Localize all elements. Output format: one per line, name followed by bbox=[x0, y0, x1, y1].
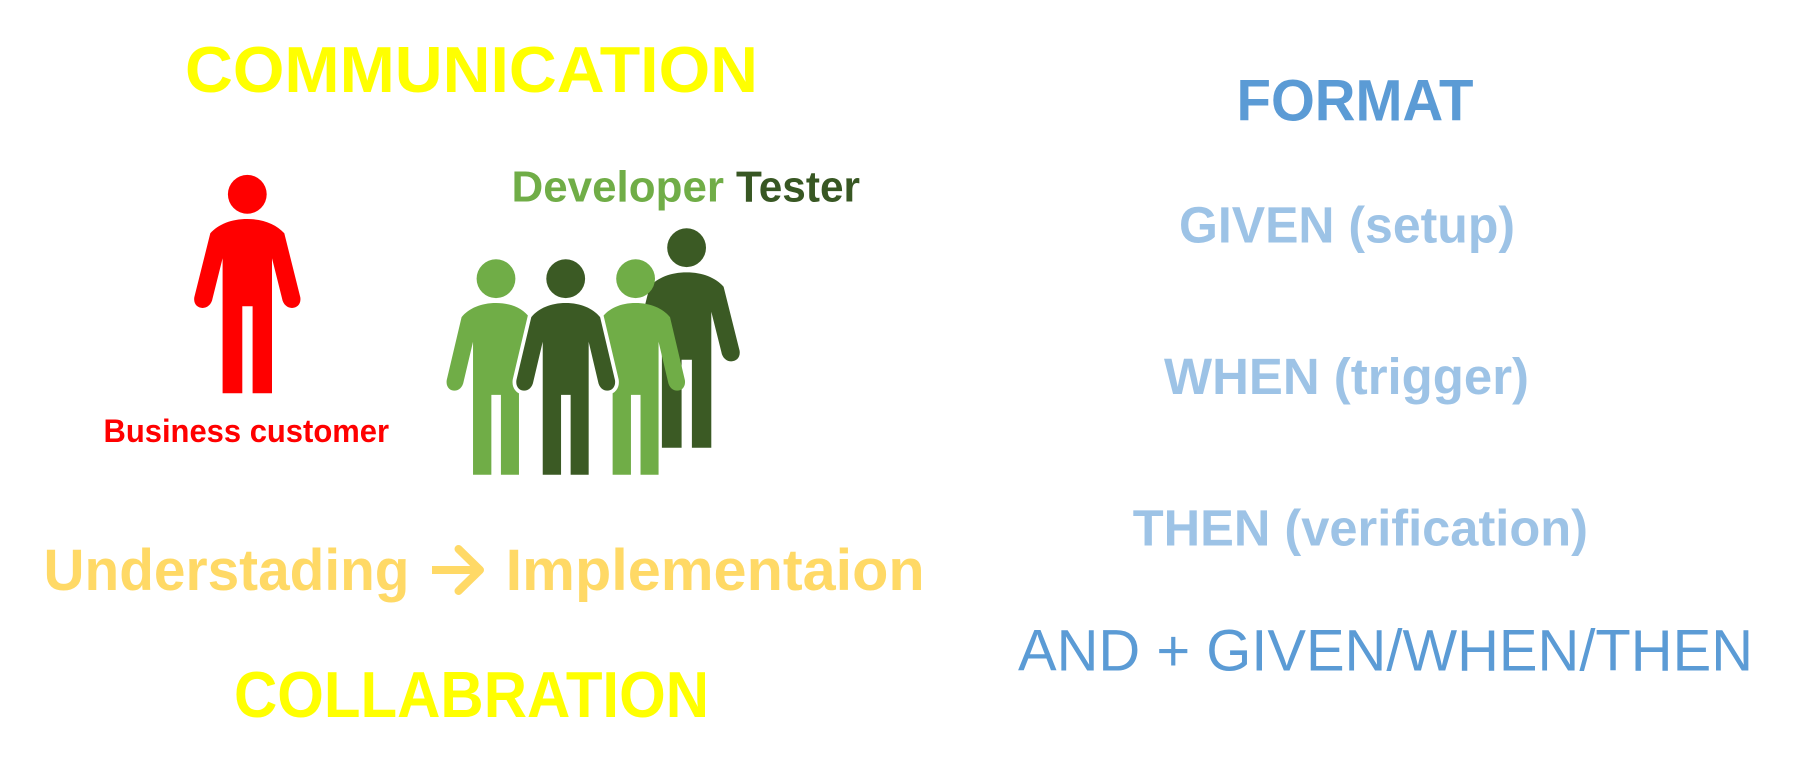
icon: business customer bbox=[194, 175, 300, 393]
label: business customer: Business customer bbox=[104, 413, 389, 449]
text: understanding to implementation: Understading bbox=[44, 538, 410, 603]
text: understanding to implementation: Implementaion bbox=[506, 538, 925, 603]
heading: format: FORMAT bbox=[1236, 69, 1474, 134]
label: tester: Tester bbox=[736, 163, 860, 212]
panel: format bbox=[1018, 69, 1753, 684]
icon: left developer bbox=[447, 259, 530, 475]
text: when: WHEN (trigger) bbox=[1164, 348, 1529, 405]
heading: communication: COMMUNICATION bbox=[185, 33, 758, 106]
icon: arrow bbox=[432, 549, 480, 591]
text: then: THEN (verification) bbox=[1133, 500, 1588, 557]
icon: front tester bbox=[516, 259, 615, 475]
text: and plus given when then: AND + GIVEN/WHEN/THEN bbox=[1018, 619, 1753, 684]
icon: right developer bbox=[602, 259, 685, 475]
label: developer: Developer bbox=[512, 163, 724, 212]
heading: collaboration: COLLABRATION bbox=[234, 658, 709, 731]
text: given: GIVEN (setup) bbox=[1179, 197, 1515, 254]
panel: communication and collaboration bbox=[44, 33, 925, 731]
icon: developer and tester team bbox=[447, 228, 740, 475]
text: understanding to implementation bbox=[44, 538, 925, 603]
icon: back tester bbox=[633, 228, 740, 448]
